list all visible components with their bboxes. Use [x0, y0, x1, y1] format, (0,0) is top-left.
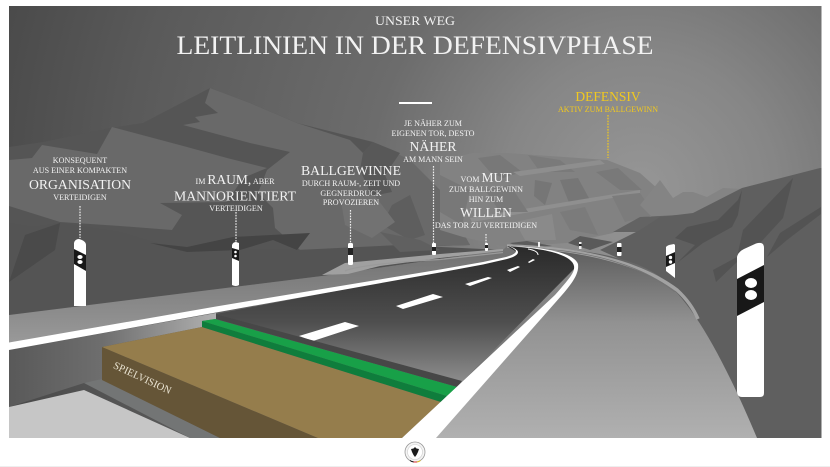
text: Raum: VERTEIDIGEN [209, 204, 263, 213]
right guardrail [507, 246, 698, 319]
text: Näher: NÄHER [410, 139, 456, 154]
text: Näher: JE NÄHER ZUM [404, 119, 462, 128]
text: Ballgewinne [301, 163, 401, 243]
page edge [0, 466, 830, 467]
left guardrail [322, 249, 503, 275]
text: Raum: MANNORIENTIERT [174, 188, 297, 204]
text: Ballgewinne: DURCH RAUM-, ZEIT UND [302, 179, 400, 188]
posts [74, 239, 764, 397]
text: Organisation: VERTEIDIGEN [53, 193, 107, 202]
wall below road [9, 313, 216, 407]
post 3 [348, 243, 353, 265]
text: Mut und Willen: WILLEN [460, 205, 512, 220]
text: Defensiv (yellow): DEFENSIV [575, 89, 641, 104]
floor [9, 390, 190, 438]
text: Organisation [29, 156, 131, 238]
mountains left [9, 88, 470, 260]
text: Raum [174, 172, 297, 242]
post 6 [538, 242, 540, 247]
road edge right white line [402, 246, 578, 438]
text: Ballgewinne: GEGNERDRUCK [320, 189, 382, 198]
right hills [510, 168, 822, 438]
subtitle: UNSER WEG [375, 14, 455, 28]
text: Raum: IM RAUM, ABER [196, 172, 275, 187]
foundation layers [84, 314, 462, 438]
text: Mut und Willen: VOM MUT [461, 170, 512, 185]
text: Mut und Willen: ZUM BALLGEWINN [449, 185, 523, 194]
post 7 [579, 242, 582, 249]
post 8 [617, 243, 622, 256]
text: Ballgewinne: PROVOZIEREN [323, 198, 379, 207]
post 9 [666, 244, 675, 278]
text: Mut und Willen: HIN ZUM [469, 195, 503, 204]
text: Organisation: ORGANISATION [29, 177, 131, 192]
title block [176, 14, 654, 60]
post 10 large [737, 243, 764, 397]
shoulder [9, 246, 517, 343]
title: LEITLINIEN IN DER DEFENSIVPHASE [176, 31, 654, 60]
text: Defensiv (yellow) [558, 89, 658, 158]
text: Näher [392, 119, 475, 243]
post 2 [232, 242, 239, 286]
label: Spielvision: SPIELVISION [111, 361, 173, 397]
road edge left white line [9, 246, 518, 350]
white bar [399, 102, 432, 104]
icon: DFB crest [405, 442, 425, 462]
text: Näher: EIGENEN TOR, DESTO [392, 129, 475, 138]
post 1 [74, 239, 86, 306]
mountains centre [440, 153, 680, 247]
lane dashes [299, 249, 538, 341]
post 4 [432, 243, 436, 255]
text: Organisation: KONSEQUENT [53, 156, 107, 165]
text: Mut und Willen [435, 170, 537, 243]
text: Näher: AM MANN SEIN [403, 155, 463, 164]
left foreground hill [9, 223, 503, 315]
post 5 [485, 243, 488, 251]
text: Organisation: AUS EINER KOMPAKTEN [33, 166, 127, 175]
text: Ballgewinne: BALLGEWINNE [301, 163, 401, 178]
text: Mut und Willen: DAS TOR ZU VERTEIDIGEN [435, 221, 537, 230]
road surface [216, 246, 575, 382]
text: Defensiv (yellow): AKTIV ZUM BALLGEWINN [558, 105, 658, 114]
ground right of road [430, 246, 757, 438]
